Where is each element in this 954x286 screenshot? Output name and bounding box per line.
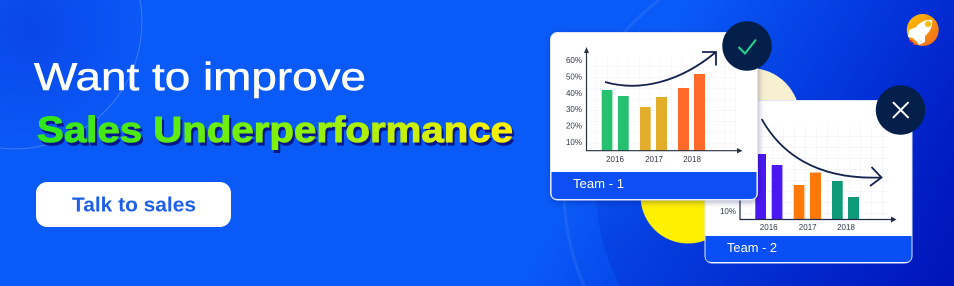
- panel: team 1 chart: [550, 32, 758, 200]
- axis labels: team 2: 2016: [760, 223, 778, 232]
- axis labels: team 1: 2016: [606, 155, 624, 164]
- heading: sales underperformance: Sales Underperformance: [37, 109, 513, 150]
- axis labels: team 1: 2017: [645, 155, 663, 164]
- axis labels: team 1: 2018: [683, 155, 701, 164]
- axis labels: team 2: [720, 207, 855, 232]
- axes: team 2: [740, 130, 896, 222]
- axis labels: team 1: [566, 56, 701, 164]
- title: want to improve: Want to improve: [34, 56, 366, 99]
- axis labels: team 1: 30%: [566, 105, 582, 114]
- icon: check badge: [722, 21, 772, 71]
- icon: rocket logo: [907, 14, 939, 46]
- arrow: upward trend: [605, 52, 716, 86]
- arrow: downward trend: [762, 119, 882, 186]
- bars: team 2: [755, 154, 859, 219]
- icon: cross badge: [876, 85, 925, 135]
- axis labels: team 2: 10%: [720, 207, 736, 216]
- band: team 1: [552, 172, 756, 199]
- decorative circle: cream: [700, 68, 800, 168]
- decorative circle: yellow: [640, 148, 736, 244]
- axis labels: team 1: 50%: [566, 72, 582, 82]
- axis labels: team 2: 2018: [837, 223, 855, 232]
- axis labels: team 2: 2017: [799, 223, 817, 232]
- button: talk to sales: Talk to sales: [72, 194, 196, 216]
- axis labels: team 1: 60%: [566, 56, 582, 65]
- axis labels: team 1: 10%: [566, 138, 582, 147]
- bars: team 1: [602, 74, 705, 150]
- band: team 2: Team - 2: [727, 241, 777, 255]
- panel: team 2 chart: [705, 100, 912, 263]
- axes: team 1: [584, 47, 742, 154]
- band: team 1: Team - 1: [573, 177, 624, 191]
- axis labels: team 1: 40%: [566, 89, 582, 98]
- grid: [586, 56, 736, 150]
- button: talk to sales: [36, 182, 231, 227]
- band: team 2: [706, 236, 912, 262]
- axis labels: team 1: 20%: [566, 122, 582, 130]
- grid: [740, 126, 888, 219]
